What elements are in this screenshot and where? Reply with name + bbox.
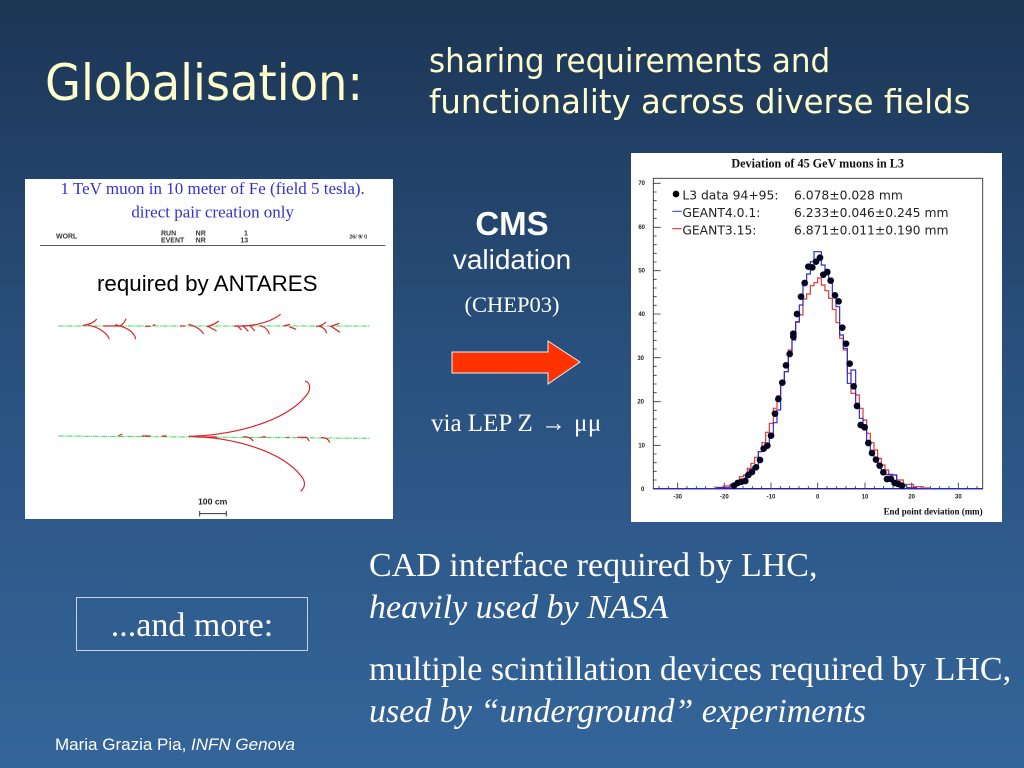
panel: deviation histogram chart: -20 xyxy=(720,494,729,500)
panel: deviation histogram chart: End point deviation (mm) xyxy=(884,506,983,516)
subtitle xyxy=(429,41,970,121)
callout: and more xyxy=(76,597,308,651)
panel: deviation histogram chart: 20 xyxy=(637,400,645,406)
subtitle: sharing requirements and xyxy=(429,41,830,80)
subtitle: functionality across diverse fields xyxy=(429,82,970,121)
panel: deviation histogram chart: 30 xyxy=(637,356,645,362)
text block: CAD interface: heavily used by NASA xyxy=(369,588,668,626)
label: CHEP03: (CHEP03) xyxy=(464,292,560,317)
label: via LEP Z to mu mu: μμ xyxy=(574,410,602,437)
text block: CAD interface: CAD interface required by LHC, xyxy=(369,547,817,584)
panel: deviation histogram chart: 0 xyxy=(641,487,645,493)
panel: deviation histogram chart: 10 xyxy=(638,443,646,449)
legend: 6.233±0.046±0.245 mm xyxy=(794,206,948,220)
panel: muon event display: direct pair creation only xyxy=(131,203,295,222)
panel: muon event display: 13 xyxy=(240,237,248,244)
legend xyxy=(672,188,948,237)
label: required by ANTARES: required by ANTARES xyxy=(97,271,318,296)
text block: scintillation devices xyxy=(369,651,1011,730)
panel: deviation histogram chart: Deviation of 45 GeV muons in L3 xyxy=(731,157,904,171)
legend: 6.871±0.011±0.190 mm xyxy=(794,223,948,237)
text block: scintillation devices: used by “underground” experiments xyxy=(369,692,866,730)
panel: deviation histogram chart: 40 xyxy=(638,312,646,318)
panel: muon event display: NR xyxy=(196,230,206,237)
label: validation: validation xyxy=(453,244,571,275)
panel: deviation histogram chart: -10 xyxy=(767,494,776,500)
text block: scintillation devices: multiple scintillation devices required by LHC, xyxy=(369,651,1011,688)
label: via LEP Z to mu mu: → xyxy=(541,410,566,437)
heading: CMS: CMS xyxy=(475,205,549,242)
panel: muon event display: 1 xyxy=(244,230,248,237)
text block: CAD interface xyxy=(369,547,817,626)
panel: deviation histogram chart: 70 xyxy=(638,181,646,187)
label: via LEP Z to mu mu: via LEP Z xyxy=(431,410,533,437)
legend: L3 data 94+95: xyxy=(682,188,779,202)
panel: deviation histogram chart: -30 xyxy=(673,494,683,500)
footer: author: Maria Grazia Pia, INFN Genova xyxy=(55,735,295,754)
panel: deviation histogram chart: 10 xyxy=(862,494,869,500)
data points xyxy=(731,254,905,489)
panel: muon event display: 1 TeV muon in 10 meter of Fe (field 5 tesla). xyxy=(61,179,365,198)
panel: muon event display: 26/ 9/ 0 xyxy=(349,234,367,240)
panel: deviation histogram chart: 50 xyxy=(638,269,646,275)
label: via LEP Z to mu mu xyxy=(431,410,602,437)
panel: deviation histogram chart: 0 xyxy=(816,494,820,500)
panel: muon event display: EVENT xyxy=(161,237,185,244)
panel: muon event display: 100 cm xyxy=(198,497,228,507)
title: Globalisation: xyxy=(45,54,363,112)
legend: 6.078±0.028 mm xyxy=(794,188,903,202)
panel: muon event display: RUN xyxy=(161,230,176,237)
panel: deviation histogram chart: 30 xyxy=(955,494,962,500)
panel: muon event display: WORL xyxy=(56,233,78,240)
panel: deviation histogram chart: 60 xyxy=(638,225,646,231)
callout: and more: ...and more: xyxy=(111,607,273,644)
panel: deviation histogram chart: 20 xyxy=(908,494,916,500)
panel: muon event display: NR xyxy=(196,237,206,244)
legend: GEANT3.15: xyxy=(682,223,756,237)
legend: GEANT4.0.1: xyxy=(682,206,760,220)
